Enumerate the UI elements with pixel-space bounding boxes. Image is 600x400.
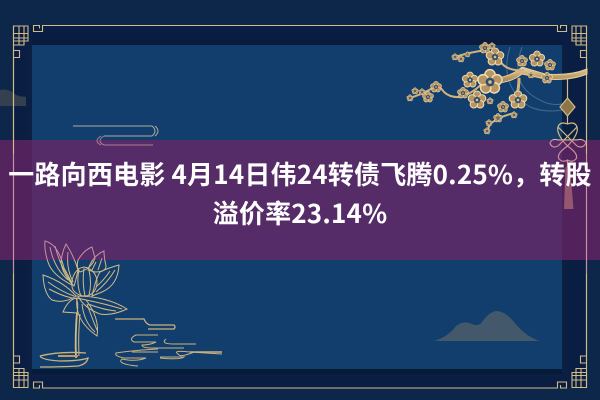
purple band: [0, 140, 600, 260]
mountain: [434, 311, 540, 341]
inner panel: [32, 45, 562, 369]
lotus flower: [43, 241, 127, 358]
plum blossom branch: [407, 42, 587, 134]
title line 2: 溢价率23.14%: [213, 194, 387, 231]
lotus pads and water lines: [40, 319, 222, 367]
chinese knot pendant: [550, 78, 586, 167]
background arcs: [507, 47, 562, 111]
distant hill left: [0, 90, 32, 106]
tassel: [564, 167, 574, 209]
title line 1: 一路向西电影 4月14日伟24转债飞腾0.25%，转股: [8, 155, 592, 192]
cloud lines: [73, 126, 158, 145]
